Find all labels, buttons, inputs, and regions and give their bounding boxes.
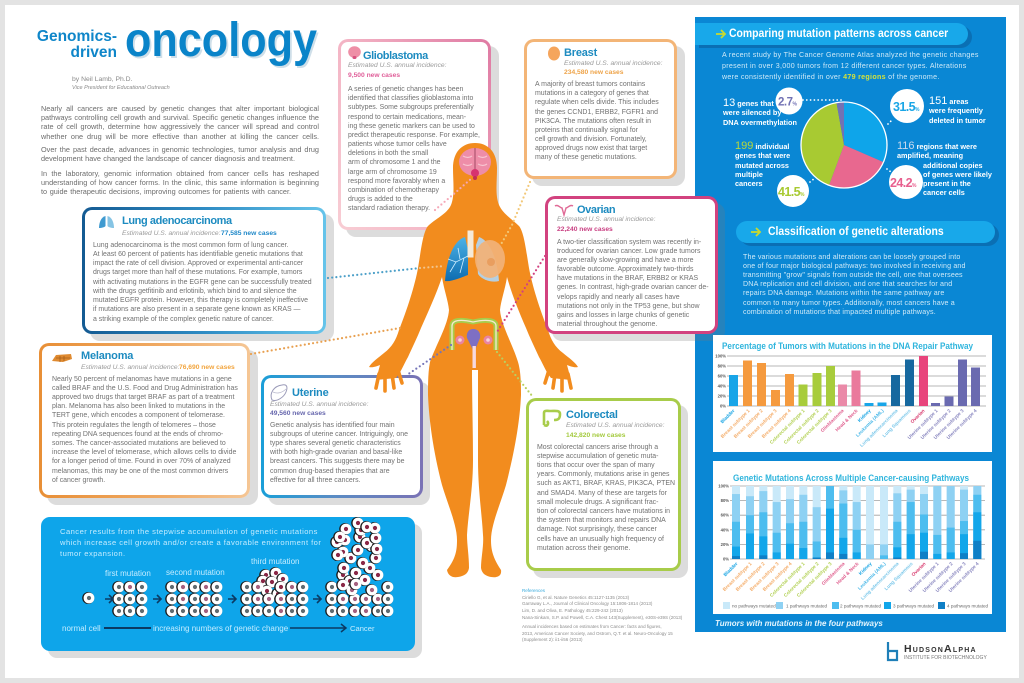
byline: Vice President for Educational Outreach: [72, 85, 170, 91]
new cases: 142,820 new cases: [566, 432, 626, 438]
icon: colon: [542, 410, 562, 427]
category labels: Breast subtype 4: [761, 408, 793, 440]
body text: troduced for ovarian cancer. Low grade tumors: [557, 248, 700, 255]
category labels: Ovarian: [911, 561, 927, 578]
body text: approved two drugs that target BRAF as part of a treatment: [52, 394, 234, 401]
body text: velops rapidly and nearly all cases have: [557, 294, 680, 301]
pie label: 116 regions: cancer cells: [923, 188, 965, 197]
references: Lim, D. and Oliva, E. Pathology 45:229-242 (2013): [522, 608, 623, 613]
body text: deletions in both the small: [348, 150, 428, 157]
grid and axis: 60%: [718, 374, 726, 378]
pie label: 13 genes: 13 genes that: [723, 97, 774, 109]
category labels: Breast subtype 3: [749, 561, 781, 593]
icon: right lung with breast: [475, 237, 505, 282]
progression line: Cancer: [350, 624, 375, 633]
legend: [723, 602, 989, 609]
banner: comparing mutation patterns: [695, 23, 968, 45]
intro text: rate of cell growth, determine how aggressively the cancer will spread and control: [41, 122, 319, 131]
body text: [535, 80, 659, 161]
pie label: 199 genes: multiple: [735, 170, 763, 179]
normal cell: [82, 592, 94, 604]
chart panel: DNA repair pathway: [713, 335, 992, 452]
body text: respond more favorably when a: [348, 178, 445, 185]
intro text: [41, 104, 319, 196]
body silhouette: [369, 143, 578, 577]
body text: of cancer growth.: [52, 477, 105, 484]
pie label: 116 regions: 116 regions that were: [897, 140, 977, 152]
body text: somes. The cancer-associated mutations are believed to: [52, 440, 226, 447]
progression line: increasing numbers of genetic change: [153, 624, 289, 633]
grid and axis: 100%: [718, 484, 729, 488]
dotted connector: breast: [500, 182, 530, 246]
incidence: Estimated U.S. annual incidence:: [348, 62, 447, 69]
category labels: Lung Squamous: [884, 561, 915, 592]
title: Genomics-driven: Genomics-: [37, 28, 117, 45]
grid and axis: 60%: [721, 513, 729, 518]
pie label: 151 areas: [929, 95, 986, 125]
one pathway segments: [732, 486, 981, 559]
category labels: Uterine subtype 2: [920, 408, 953, 441]
dotted connector: colorectal: [497, 352, 533, 397]
body text: the genes CCND1, ERBB2, FGFR1 and: [535, 109, 658, 116]
legend: 2 pathways mutated: [840, 604, 882, 608]
body text: repeating DNA sequences found at the ends of chromo-: [52, 431, 223, 438]
intro text: understanding of how cancer forms. In the clinic, this same information is beginning: [41, 178, 319, 187]
heading: Colorectal: [566, 409, 618, 421]
intro text: In the laboratory, genomic information obtained from cancer cells has reshaped: [41, 169, 319, 178]
pie label: 116 regions: amplified, meaning: [897, 151, 963, 160]
body text: Nearly 50 percent of melanomas have mutations in a gene: [52, 376, 232, 382]
grid and axis: 80%: [721, 498, 729, 503]
body text: TERT gene, which encodes a component of telomerase.: [52, 412, 225, 419]
incidence: Estimated U.S. annual incidence:: [564, 60, 663, 67]
body text: if mutations are also present in a separate gene known as KRAS —: [93, 306, 300, 313]
category labels: Uterine subtype 1: [907, 408, 940, 441]
callout 41.5%: 41.5%: [778, 185, 805, 199]
category labels: Leukemia (AML): [855, 408, 886, 439]
heading: Ovarian: [577, 204, 615, 216]
body text: tions that occur over the span of many: [537, 462, 655, 469]
panel: cancer progression: [41, 517, 415, 651]
icon: arrow: [751, 227, 762, 237]
body text: material throughout the genome.: [557, 321, 657, 328]
category labels: Glioblastoma: [821, 561, 847, 587]
pie label: 151 areas: deleted in tumor: [929, 116, 986, 125]
body text: breast cancers. This suggests there may be: [270, 458, 404, 465]
grid and axis: 0%: [720, 404, 726, 408]
heading: Classification of genetic alterations: [768, 225, 944, 238]
incidence: Estimated U.S. annual incidence:: [557, 216, 656, 223]
body text: common drug-based therapies that are: [270, 468, 390, 475]
grid and axis: [718, 484, 985, 562]
category labels: Colorectal subtype 2: [783, 561, 821, 599]
category labels: [722, 561, 981, 602]
paragraph: classification: [743, 252, 966, 316]
icon: uterus outline: [270, 384, 288, 401]
body text: melanomas, this may be one of the most common drivers: [52, 468, 228, 475]
callout 31.5%: 31.5%: [893, 100, 920, 114]
body text: and SMAD4. Many of these are targets for: [537, 490, 667, 497]
pie label: 151 areas: 151 areas: [929, 95, 968, 107]
category labels: Colorectal subtype 3: [796, 561, 834, 599]
body text: Lung adenocarcinoma is the most common form of lung cancer.: [93, 242, 289, 248]
category labels: Colorectal subtype 2: [783, 408, 821, 446]
body text: many of these genetic mutations.: [535, 154, 637, 161]
heading: Glioblastoma: [363, 50, 428, 62]
title: Genomics-driven: [37, 28, 117, 61]
paragraph: classification: common to many tumor types. Additionally, most cancers have a: [743, 299, 955, 307]
dotted connector: melanoma: [251, 328, 400, 354]
icon: trachea: [468, 231, 473, 257]
category labels: Bladder: [723, 561, 739, 578]
category labels: Colorectal subtype 1: [769, 408, 807, 446]
callout 2.7%: 2.7%: [778, 96, 798, 108]
incidence: Estimated U.S. annual incidence:: [566, 422, 665, 429]
legend: 3 pathways mutated: [893, 604, 935, 608]
new cases: 22,240 new cases: [557, 226, 613, 233]
body text: [93, 242, 312, 322]
body text: damage. Not surprisingly, these cancer: [537, 526, 657, 533]
body text: plan. Melanoma has also been linked to mutations in the: [52, 403, 225, 410]
heading: Breast: [564, 47, 597, 59]
body text: impact the rate of cell division. Approved or experimental anti-cancer: [93, 260, 303, 267]
references: Garraway L.A., Journal of Clinical Oncology 15:1806-1814 (2013): [522, 601, 652, 606]
grid and axis: 80%: [718, 364, 726, 368]
stage labels: third mutation: [251, 557, 299, 566]
callout 24.2%: [889, 165, 923, 199]
three pathway segments: [732, 509, 981, 559]
no pathway segments: [732, 486, 981, 559]
body text: the system that monitors and repairs DNA: [537, 517, 666, 524]
body text: drugs target more than half of these mutations. For example, tumors: [93, 269, 302, 276]
stage arrows: [105, 595, 321, 603]
dotted connector: lung: [328, 268, 420, 278]
body text: standard radiation therapy.: [348, 205, 430, 212]
paragraph: classification: repairs DNA damage. Mutations within the same pathway are: [743, 289, 945, 297]
body text: small molecule drugs. A significant frac-: [537, 499, 658, 506]
category labels: Colorectal subtype 1: [769, 561, 807, 599]
body text: genes. In contrast, high-grade ovarian cancer de-: [557, 284, 709, 291]
panel: Colorectal: [526, 398, 681, 571]
body text: [557, 238, 709, 328]
stage labels: second mutation: [166, 568, 225, 577]
new cases: 76,690 new cases: [179, 364, 235, 371]
body text: tion of colorectal cancers have mutations in: [537, 508, 670, 515]
grid and axis: 40%: [718, 384, 726, 388]
paragraph: study summary: [722, 51, 979, 81]
body text: cells have an unusually high frequency of: [537, 536, 664, 543]
paragraph: study summary: present in over 3,000 tumors from 12 different cancer types. Alterations: [722, 62, 967, 70]
callout 24.2%: 24.2%: [890, 176, 917, 190]
body text: drugs is added to the: [348, 196, 413, 203]
category labels: Breast subtype 3: [747, 408, 779, 440]
stacked bars: [732, 486, 981, 559]
category labels: Breast subtype 4: [762, 561, 794, 593]
body text: such as AKT1, BRAF, KRAS, PIK3CA, PTEN: [537, 480, 675, 487]
logo: HudsonAlpha: [886, 642, 987, 662]
progression line: normal cell: [62, 624, 101, 633]
body text: predict therapeutic response. For example,: [348, 132, 480, 139]
dotted connector: ovarian: [497, 256, 545, 332]
incidence: Estimated U.S. annual incidence:: [81, 364, 180, 371]
heading: Lung adenocarcinoma: [122, 215, 232, 227]
intro text: tumor expansion.: [60, 549, 126, 558]
body text: Most colorectal cancers arise through a: [537, 444, 658, 450]
connector dots: [803, 100, 893, 182]
intro text: Over the past decade, advances in genomic technologies, tumor analysis and drug: [41, 145, 319, 154]
body text: [52, 376, 238, 484]
title: [37, 14, 318, 68]
pie label: 199 genes: mutated across: [735, 161, 789, 170]
logo wordmark: HudsonAlpha: [904, 643, 977, 655]
intro text: development have changed the landscape of cancer diagnosis and treatment.: [41, 154, 295, 163]
category labels: Head & Neck: [834, 408, 860, 433]
grid and axis: 20%: [721, 542, 729, 547]
category labels: Ovarian: [910, 408, 926, 425]
references: References: [522, 588, 545, 593]
body text: subtypes. Some subgroups preferentially: [348, 104, 474, 111]
body text: PIK3CA. The mutations often result in: [535, 118, 651, 125]
body text: A series of genetic changes has been: [348, 86, 463, 93]
category labels: Uterine subtype 3: [933, 408, 966, 441]
body text: respond to certain medications, mean-: [348, 114, 466, 121]
body text: called BRAF and the U.S. Food and Drug Administration has: [52, 385, 238, 392]
body text: increase the level of telomerase, which allows cells to divide: [52, 449, 236, 456]
category labels: Breast subtype 2: [733, 408, 765, 440]
icon: ovaries: [554, 204, 574, 218]
body text: favorable outcome. Approximately two-thirds: [557, 266, 694, 273]
grid and axis: 100%: [715, 354, 726, 358]
legend: 1 pathways mutated: [786, 604, 828, 608]
intro text: to guide therapeutic decisions, improving outcomes for patients with cancer.: [41, 187, 291, 196]
pie label: 199 genes: 199 individual: [735, 140, 789, 152]
body text: This protein regulates the length of telomeres – those: [52, 422, 216, 429]
panel: Uterine: [261, 375, 423, 498]
category labels: Leukemia (AML): [857, 561, 888, 592]
references: [522, 588, 682, 642]
category labels: Glioblastoma: [820, 408, 846, 434]
first mutation group: [112, 581, 147, 617]
references: (Supplement 2): ii1-ii56 (2013): [522, 637, 583, 642]
paragraph: classification: The various mutations and alterations can be loosely grouped into: [743, 252, 960, 260]
body text: with both high-grade ovarian and basal-like: [270, 449, 402, 456]
heading: Uterine: [292, 387, 328, 399]
paragraph: study summary: A recent study by The Cancer Genome Atlas analyzed the genetic changes: [722, 51, 979, 59]
body text: [537, 444, 675, 552]
intro text: which increase cell growth and/or create a favorable environment for: [60, 538, 321, 547]
dotted connector: glioblastoma: [435, 178, 472, 210]
intro text: pathways controlling cell growth and survival. Specific genetic changes influence the: [41, 113, 319, 122]
category labels: Breast subtype 2: [735, 561, 767, 593]
pie label: 116 regions: additional copies: [923, 161, 983, 170]
category labels: Uterine subtype 4: [948, 561, 981, 594]
category labels: Lung Squamous: [882, 408, 913, 439]
incidence: Estimated U.S. annual incidence:: [122, 230, 221, 237]
paragraph: classification: DNA replication and cell division, and one that searches for and: [743, 280, 952, 288]
chart caption: Tumors with mutations in the four pathways: [715, 619, 883, 628]
byline: [72, 76, 170, 91]
category labels: Kidney: [858, 561, 874, 577]
category labels: Bladder: [720, 408, 736, 425]
logo subtitle: INSTITUTE FOR BIOTECHNOLOGY: [904, 655, 987, 661]
pie label: 13 genes: were silenced by: [723, 108, 781, 117]
pie label: 199 genes: [735, 140, 790, 188]
icon: brain: [459, 148, 491, 180]
panel: Breast: [524, 39, 677, 179]
panel: Melanoma: [39, 343, 250, 498]
category labels: Breast subtype 1: [722, 561, 754, 593]
body text: [348, 86, 480, 212]
panel: Lung adenocarcinoma: [82, 207, 326, 334]
banner: classification: [736, 221, 995, 243]
body text: [270, 422, 408, 484]
body text: mutated EGFR protein. However, this therapy is completely ineffective: [93, 297, 308, 304]
new cases: 77,585 new cases: [221, 230, 277, 237]
icon: breast: [548, 46, 560, 60]
body text: arm of chromosome 1 and the: [348, 159, 441, 166]
category labels: Head & Neck: [835, 561, 861, 586]
pie label: 151 areas: were frequently: [929, 106, 983, 115]
third mutation group: [240, 567, 308, 617]
body text: a striking example of the complex genetic nature of cancer.: [93, 316, 274, 322]
category labels: Uterine subtype 3: [935, 561, 968, 594]
panel: Ovarian: [545, 196, 718, 334]
pie label: 116 regions: of genes were likely: [923, 170, 992, 179]
pie label: 116 regions: [897, 140, 992, 197]
body text: A two-tier classification system was recently in-: [557, 238, 701, 246]
chart panel: multiple pathways: [713, 461, 992, 614]
body text: combination of chemotherapy: [348, 187, 439, 194]
category labels: Colorectal subtype 3: [796, 408, 834, 446]
new cases: 49,560 new cases: [270, 410, 326, 416]
icon: lungs: [99, 216, 114, 228]
intro text: whether one drug will be more effective than another at killing the cancer cells.: [41, 132, 319, 141]
body text: approved drugs now exist that target: [535, 145, 647, 152]
new cases: 234,580 new cases: [564, 69, 624, 76]
icon: brain: [348, 46, 361, 59]
pie label: 116 regions: present in the: [923, 179, 971, 188]
tumor pile: [325, 517, 393, 617]
icon: colon and reproductive organs: [452, 320, 496, 368]
pie label: 13 genes: DNA overmethylation: [723, 118, 797, 127]
body text: A majority of breast tumors contains: [535, 81, 645, 88]
icon: arrow: [716, 29, 726, 39]
legend: no pathways mutated: [732, 604, 776, 608]
progression line: [62, 624, 375, 633]
chart title: Percentage of Tumors with Mutations in the DNA Repair Pathway: [722, 340, 974, 351]
stage labels: [105, 557, 299, 578]
grid and axis: 20%: [718, 394, 726, 398]
category labels: Kidney: [857, 408, 873, 424]
paragraph: classification: one of four major biological pathways: two involved in receiving and: [743, 262, 966, 270]
pie slices: [801, 102, 887, 188]
body text: years. Commonly, mutations arise in genes: [537, 471, 670, 478]
body text: proteins that continually signal for: [535, 127, 638, 134]
callout 31.5%: [890, 89, 924, 123]
body text: type shares several genetic characteristics: [270, 440, 401, 447]
body text: have mutations in the BRAF, ERBB2 or KRAS: [557, 275, 698, 282]
bars: [729, 356, 980, 406]
body text: identified that classifies glioblastoma into: [348, 95, 473, 102]
body text: regulate when cells divide. This includes: [535, 99, 659, 106]
category labels: Uterine subtype 4: [946, 408, 979, 441]
body text: mutations not only in the TP53 gene, but show: [557, 303, 700, 310]
category labels: [720, 408, 979, 449]
dotted connector: uterine: [407, 345, 451, 375]
body text: patients whose tumor cells have: [348, 141, 447, 148]
body text: are generally slow-growing and have a more: [557, 257, 694, 264]
body text: cell growth and division. Fortunately,: [535, 136, 647, 143]
body text: with activating mutations in the EGFR gene can be successfully treated: [93, 278, 312, 286]
pie label: 13 genes: [723, 97, 797, 127]
incidence: Estimated U.S. annual incidence:: [270, 401, 369, 408]
body text: with the drugs getfitinib and erlotinib, which bind to and silence the: [93, 288, 297, 295]
paragraph: classification: transmitting "grow" signals from outside the cell, one that oversees: [743, 271, 963, 279]
intro text: Cancer results from the stepwise accumulation of genetic mutations: [60, 527, 318, 536]
body text: gains and losses in large chunks of genetic: [557, 312, 689, 319]
paragraph: classification: combination of mutations that impacted multiple pathways.: [743, 308, 936, 316]
grid and axis: 0%: [723, 556, 729, 562]
heading: Comparing mutation patterns across cancer: [729, 27, 948, 40]
icon: skin: [52, 354, 72, 362]
callout 2.7%: [776, 88, 802, 114]
new cases: 9,500 new cases: [348, 72, 400, 79]
references: Nana-Sinkam, S.P. and Powell, C.A. Chest 143(Supplement), e30S-e39S (2013) Annual incidences based on estimates from Cancer: facts and figures,: [522, 615, 682, 629]
body text: Genetic analysis has identified four main: [270, 422, 395, 428]
body text: mutation across their genome.: [537, 545, 630, 552]
icon: left lung: [445, 237, 468, 281]
grid and axis: [715, 354, 986, 408]
stage labels: first mutation: [105, 569, 151, 578]
references: Ciriello G, et al. Nature Genetics 45:1127-1135 (2013): [522, 595, 629, 600]
intro text: [60, 527, 321, 558]
icon: logo mark: [886, 642, 898, 662]
category labels: Lung adenocarcinoma: [859, 408, 900, 449]
body text: effective for all three cancers.: [270, 477, 360, 484]
category labels: Uterine subtype 2: [922, 561, 955, 594]
category labels: Lung adenocarcinoma: [860, 561, 901, 602]
panel: Glioblastoma: [338, 39, 491, 230]
body text: ing these genetic markers can be used to: [348, 123, 475, 130]
panel: right blue column: [695, 17, 1006, 632]
grid and axis: 40%: [721, 527, 729, 532]
chart title: Genetic Mutations Across Multiple Cancer-causing Pathways: [733, 472, 969, 483]
pie label: 199 genes: cancers: [735, 179, 763, 188]
title: oncology: oncology: [125, 14, 317, 67]
body text: stepwise accumulation of genetic muta-: [537, 453, 658, 460]
legend: 4 pathways mutated: [947, 604, 989, 608]
intro text: Nearly all cancers are caused by genetic changes that alter important biological: [41, 104, 319, 113]
paragraph: study summary: were consistently identified in over 479 regions of the genome.: [722, 73, 940, 81]
pie label: 199 genes: genes that were: [735, 151, 790, 160]
title: Genomics-driven: driven: [70, 44, 117, 61]
body text: large arm of chromosome 19: [348, 169, 437, 176]
callout 41.5%: [777, 175, 809, 207]
category labels: Uterine subtype 1: [908, 561, 941, 594]
heading: Melanoma: [81, 350, 133, 362]
category labels: Breast subtype 1: [720, 408, 752, 440]
body text: mutations in a category of genes that: [535, 90, 649, 97]
body text: At least 60 percent of patients has identifiable genetic mutations that: [93, 251, 303, 258]
body text: for a longer period of time. Found in over 70% of analyzed: [52, 458, 231, 465]
four pathway segments: [732, 541, 981, 559]
byline: by Neil Lamb, Ph.D.: [72, 76, 132, 83]
references: 2013, American Cancer Society, and Ostrom, Q.T. et al. Neuro-Oncology 15: [522, 631, 673, 636]
two pathway segments: [732, 486, 981, 559]
second mutation group: [165, 581, 222, 617]
body text: subgroups of uterine cancer. Intriguingly, one: [270, 431, 408, 438]
